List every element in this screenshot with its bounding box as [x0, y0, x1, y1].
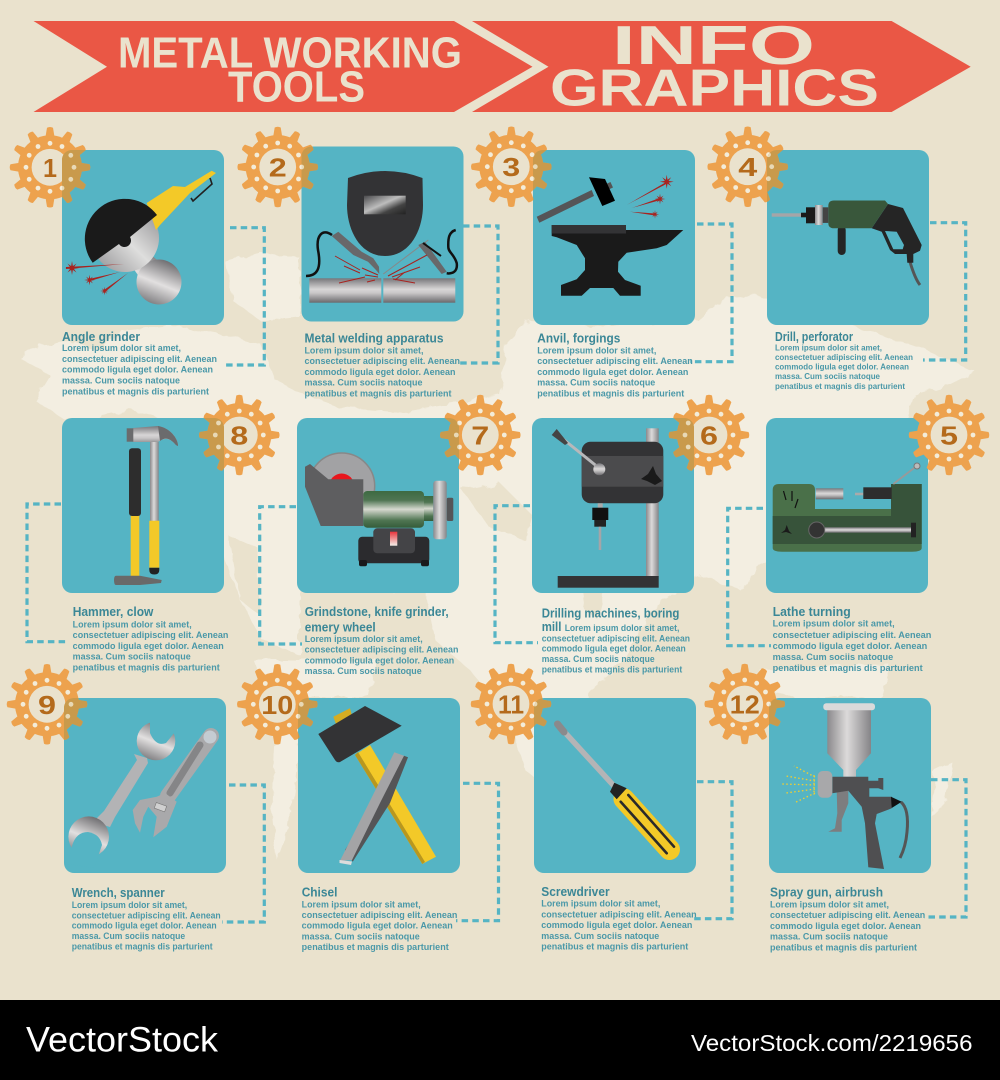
panel: anvil, forgings — [471, 126, 732, 398]
caption: commodo ligula eget dolor. Aenean — [62, 365, 213, 375]
badge 4: 4 — [738, 152, 758, 182]
caption: Screwdriver — [541, 885, 610, 899]
panel: screwdriver — [471, 664, 732, 952]
caption: consectetuer adipiscing elit. Aenean — [304, 356, 460, 366]
card — [297, 418, 459, 593]
caption — [62, 330, 217, 396]
caption: consectetuer adipiscing elit. Aenean — [305, 645, 458, 655]
connector — [222, 785, 264, 922]
icon: angle grinder — [65, 171, 216, 304]
caption: Lorem ipsum dolor sit amet, — [62, 343, 181, 353]
icon: screwdriver — [558, 724, 674, 853]
caption: Lorem ipsum dolor sit amet, — [302, 899, 421, 909]
connector — [690, 782, 732, 919]
panel: lathe turning — [728, 395, 989, 673]
caption — [73, 605, 228, 672]
caption: Chisel — [302, 886, 337, 900]
caption: Lathe turning — [773, 605, 851, 619]
caption: massa. Cum sociis natoque — [62, 376, 180, 386]
badge 8 — [199, 395, 280, 475]
icon: drill press — [552, 428, 663, 588]
badge overlap — [199, 418, 224, 471]
connector — [690, 224, 732, 362]
heading: metal working tools: METAL WORKING — [118, 28, 462, 78]
caption: massa. Cum sociis natoque — [72, 931, 185, 941]
caption: Lorem ipsum dolor sit amet, — [72, 900, 187, 910]
connector — [27, 504, 69, 642]
caption: consectetuer adipiscing elit. Aenean — [770, 910, 925, 920]
badge 9 — [7, 664, 87, 745]
title banner — [34, 14, 971, 118]
icon: anvil and hammer — [537, 175, 683, 296]
badge 9: 9 — [38, 690, 56, 720]
caption: emery wheel — [305, 620, 376, 634]
caption: Lorem ipsum dolor sit amet, — [541, 899, 660, 909]
caption — [770, 886, 925, 952]
caption: Lorem ipsum dolor sit amet, — [73, 619, 192, 629]
badge overlap — [534, 698, 552, 726]
footer bar — [0, 1000, 1000, 1080]
caption: commodo ligula eget dolor. Aenean — [541, 920, 692, 930]
badge overlap — [668, 418, 694, 471]
caption: consectetuer adipiscing elit. Aenean — [302, 910, 457, 920]
caption — [72, 886, 221, 951]
caption: Lorem ipsum dolor sit amet, — [537, 345, 656, 355]
badge 10: 10 — [261, 690, 293, 720]
caption: penatibus et magnis dis parturient — [770, 942, 917, 952]
caption: massa. Cum sociis natoque — [305, 666, 422, 676]
caption: Lorem ipsum dolor sit amet, — [565, 623, 679, 633]
caption: penatibus et magnis dis parturient — [73, 662, 220, 672]
badge 5 — [909, 395, 989, 475]
caption: Wrench, spanner — [72, 886, 165, 900]
caption: Anvil, forgings — [537, 332, 620, 346]
caption: Angle grinder — [62, 330, 140, 344]
connector — [456, 783, 498, 921]
caption: Grindstone, knife grinder, — [305, 605, 449, 619]
caption: penatibus et magnis dis parturient — [302, 942, 449, 952]
caption: consectetuer adipiscing elit. Aenean — [62, 354, 217, 364]
panel: chisel — [237, 664, 498, 952]
badge 6 — [669, 395, 749, 475]
card — [62, 150, 224, 325]
icon: drill — [772, 200, 922, 285]
caption: commodo ligula eget dolor. Aenean — [770, 921, 921, 931]
footer — [0, 1000, 1000, 1080]
panel: grindstone — [260, 395, 521, 676]
image id: VectorStock.com/2219656 — [691, 1030, 972, 1056]
heading: metal working tools — [118, 28, 462, 112]
caption: consectetuer adipiscing elit. Aenean — [773, 630, 931, 640]
caption: massa. Cum sociis natoque — [304, 378, 423, 388]
banner arrow right — [472, 21, 971, 112]
panel: angle grinder — [10, 127, 264, 397]
world map background — [20, 252, 976, 860]
card — [62, 418, 224, 593]
badge 6: 6 — [700, 420, 718, 450]
card — [767, 150, 929, 325]
badge 2: 2 — [269, 152, 287, 182]
badge 8: 8 — [230, 420, 248, 450]
card — [769, 698, 931, 873]
caption: consectetuer adipiscing elit. Aenean — [542, 633, 690, 643]
caption: Hammer, clow — [73, 605, 154, 619]
badge overlap — [62, 150, 90, 203]
badge 7: 7 — [471, 420, 489, 450]
caption: mill — [542, 620, 561, 634]
card — [532, 418, 694, 593]
caption: consectetuer adipiscing elit. Aenean — [775, 353, 913, 362]
caption: penatibus et magnis dis parturient — [72, 941, 213, 951]
connector — [924, 780, 966, 917]
card — [534, 698, 696, 873]
caption: consectetuer adipiscing elit. Aenean — [537, 356, 693, 366]
badge overlap — [769, 698, 785, 726]
caption: commodo ligula eget dolor. Aenean — [775, 363, 909, 372]
badge 1: 1 — [43, 153, 57, 183]
badge 7 — [440, 395, 521, 475]
badge 12: 12 — [730, 690, 760, 720]
caption: penatibus et magnis dis parturient — [541, 942, 688, 952]
icon: hammer and chisel — [318, 706, 436, 865]
caption: Lorem ipsum dolor sit amet, — [305, 634, 423, 644]
heading: info graphics: GRAPHICS — [550, 60, 879, 118]
card — [533, 150, 695, 325]
badge 3: 3 — [502, 152, 520, 182]
caption: penatibus et magnis dis parturient — [542, 664, 682, 674]
panel: spray gun — [704, 664, 966, 952]
caption — [302, 886, 457, 952]
connector — [222, 228, 264, 365]
caption: commodo ligula eget dolor. Aenean — [73, 641, 224, 651]
caption: massa. Cum sociis natoque — [302, 931, 420, 941]
caption: consectetuer adipiscing elit. Aenean — [541, 910, 697, 920]
caption: penatibus et magnis dis parturient — [773, 663, 923, 673]
caption: penatibus et magnis dis parturient — [304, 388, 452, 398]
panel: wrench, spanner — [7, 664, 264, 951]
badge 1 — [10, 127, 90, 208]
caption: Lorem ipsum dolor sit amet, — [304, 345, 424, 355]
icon: spray gun — [782, 703, 907, 869]
caption: commodo ligula eget dolor. Aenean — [537, 367, 688, 377]
heading: info graphics — [550, 14, 879, 118]
caption: massa. Cum sociis natoque — [773, 652, 893, 662]
badge 10 — [237, 664, 318, 745]
caption: Drilling machines, boring — [542, 606, 679, 620]
connector — [495, 506, 538, 643]
caption: commodo ligula eget dolor. Aenean — [773, 641, 927, 651]
badge 3 — [471, 126, 552, 207]
caption — [775, 330, 913, 391]
badge overlap — [767, 150, 788, 202]
caption — [542, 606, 690, 674]
icon: hammers — [114, 426, 178, 585]
caption: consectetuer adipiscing elit. Aenean — [72, 910, 221, 920]
caption: commodo ligula eget dolor. Aenean — [542, 644, 686, 654]
caption: Drill, perforator — [775, 330, 853, 344]
panel: hammer, clow — [27, 395, 280, 672]
icon: bench grinder — [305, 453, 453, 566]
badge 11 — [471, 664, 551, 744]
caption: commodo ligula eget dolor. Aenean — [72, 921, 217, 931]
caption: commodo ligula eget dolor. Aenean — [302, 921, 453, 931]
icon: lathe — [773, 463, 922, 552]
caption: commodo ligula eget dolor. Aenean — [305, 655, 454, 665]
panel: drill, perforator — [707, 126, 966, 391]
card — [766, 418, 928, 593]
card — [298, 698, 460, 873]
badge 2 — [237, 127, 318, 207]
caption: Lorem ipsum dolor sit amet, — [773, 619, 895, 629]
caption: penatibus et magnis dis parturient — [537, 388, 684, 398]
caption — [304, 332, 460, 398]
badge 5: 5 — [940, 420, 958, 450]
caption: commodo ligula eget dolor. Aenean — [304, 367, 456, 377]
caption: Metal welding apparatus — [304, 332, 444, 346]
badge 11: 11 — [498, 690, 524, 720]
badge overlap — [533, 150, 552, 200]
badge 12 — [704, 664, 785, 744]
caption: Spray gun, airbrush — [770, 886, 883, 900]
caption: massa. Cum sociis natoque — [770, 932, 888, 942]
connector — [260, 507, 302, 644]
caption: massa. Cum sociis natoque — [542, 654, 655, 664]
icon: wrenches — [68, 718, 216, 868]
badge overlap — [302, 146, 318, 190]
caption: massa. Cum sociis natoque — [775, 372, 881, 381]
connector — [923, 223, 966, 360]
card — [302, 146, 464, 322]
heading: info graphics: INFO — [612, 14, 815, 76]
banner arrow left — [34, 21, 532, 112]
caption — [305, 605, 458, 676]
caption: massa. Cum sociis natoque — [537, 378, 655, 388]
brand: VectorStock — [26, 1020, 218, 1060]
panel: drilling machines — [495, 395, 749, 674]
caption — [773, 605, 931, 673]
caption: Lorem ipsum dolor sit amet, — [775, 344, 882, 352]
connector — [728, 508, 771, 646]
panel: metal welding apparatus — [237, 127, 498, 398]
caption: penatibus et magnis dis parturient — [62, 386, 209, 396]
badge overlap — [298, 698, 318, 739]
caption: massa. Cum sociis natoque — [73, 652, 191, 662]
caption: consectetuer adipiscing elit. Aenean — [73, 630, 228, 640]
caption: massa. Cum sociis natoque — [541, 931, 659, 941]
badge overlap — [440, 418, 459, 469]
badge 4 — [707, 126, 788, 207]
caption: penatibus et magnis dis parturient — [775, 382, 905, 391]
badge overlap — [64, 698, 88, 740]
icon: welding mask and torches — [306, 171, 457, 303]
caption: Lorem ipsum dolor sit amet, — [770, 899, 889, 909]
card — [64, 698, 226, 873]
connector — [456, 226, 498, 363]
heading: metal working tools: TOOLS — [228, 63, 365, 112]
caption — [541, 885, 697, 952]
caption — [537, 332, 693, 398]
